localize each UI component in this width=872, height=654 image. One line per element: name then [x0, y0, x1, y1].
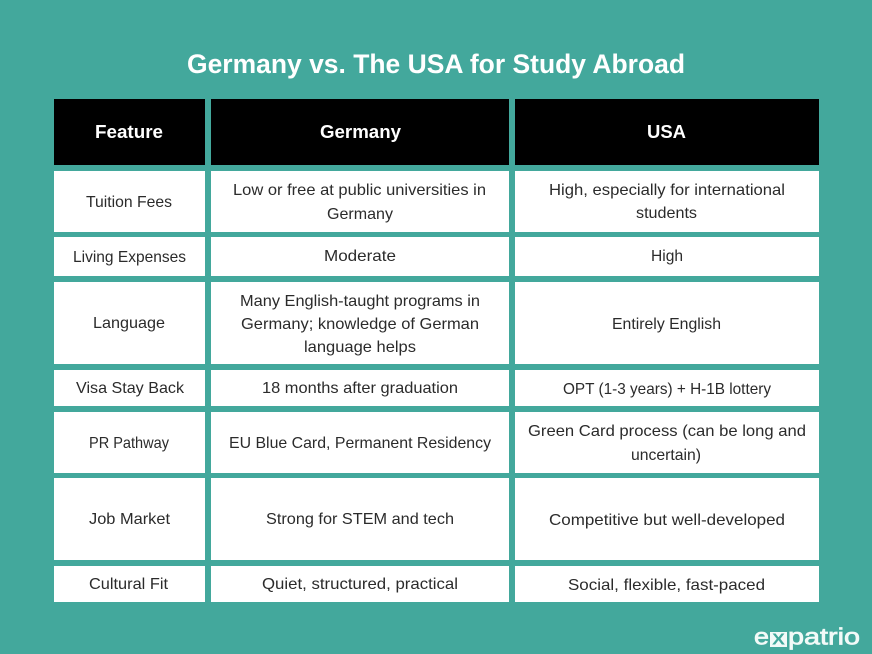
row: cultural fit [54, 566, 819, 602]
header row: Feature [95, 122, 163, 142]
row: PR pathway: EU Blue Card, Permanent Residency [229, 435, 491, 452]
row: living expenses: Living Expenses [73, 249, 186, 266]
row: cultural fit: Quiet, structured, practical [262, 576, 458, 593]
row: job market [54, 478, 819, 560]
row: PR pathway [54, 412, 819, 473]
row: language: Language [93, 315, 165, 332]
row: cultural fit: Social, flexible, fast-paced [568, 577, 765, 594]
row: job market: Job Market [89, 511, 171, 528]
row: cultural fit: Cultural Fit [89, 576, 169, 593]
row: visa stay back: 18 months after graduation [262, 380, 458, 397]
logo: expatrio [754, 624, 860, 650]
header row: USA [647, 122, 686, 142]
row: living expenses: Moderate [324, 248, 396, 265]
row: tuition fees: students [636, 205, 697, 222]
row: visa stay back: OPT (1-3 years) + H-1B lottery [563, 381, 771, 398]
logo: expatrio: patrio [788, 624, 860, 650]
row: language: Entirely English [612, 316, 721, 333]
header row: Germany [320, 122, 401, 142]
row: language: Many English-taught programs in [240, 293, 480, 310]
row: tuition fees: Germany [327, 206, 393, 223]
row: living expenses: High [651, 248, 683, 265]
row: PR pathway: Green Card process (can be long and [528, 423, 806, 440]
row: visa stay back: Visa Stay Back [76, 380, 185, 397]
row: language: language helps [304, 339, 416, 356]
row: language: Germany; knowledge of German [241, 316, 479, 333]
logo: expatrio: e [754, 624, 769, 650]
header row [54, 99, 819, 165]
row: visa stay back [54, 370, 819, 406]
row: PR pathway: PR Pathway [89, 435, 169, 452]
table [54, 99, 819, 602]
row: tuition fees: Low or free at public universities in [233, 182, 486, 199]
row: tuition fees: Tuition Fees [86, 194, 172, 211]
logo: expatrio: X [772, 632, 785, 648]
row: language [54, 282, 819, 364]
row: job market: Competitive but well-developed [549, 512, 785, 529]
title: Germany vs. The USA for Study Abroad [187, 49, 685, 79]
row: job market: Strong for STEM and tech [266, 511, 454, 528]
row: PR pathway: uncertain) [631, 447, 701, 464]
row: tuition fees: High, especially for international [549, 182, 785, 199]
row: tuition fees [54, 171, 819, 232]
row: living expenses [54, 237, 819, 276]
